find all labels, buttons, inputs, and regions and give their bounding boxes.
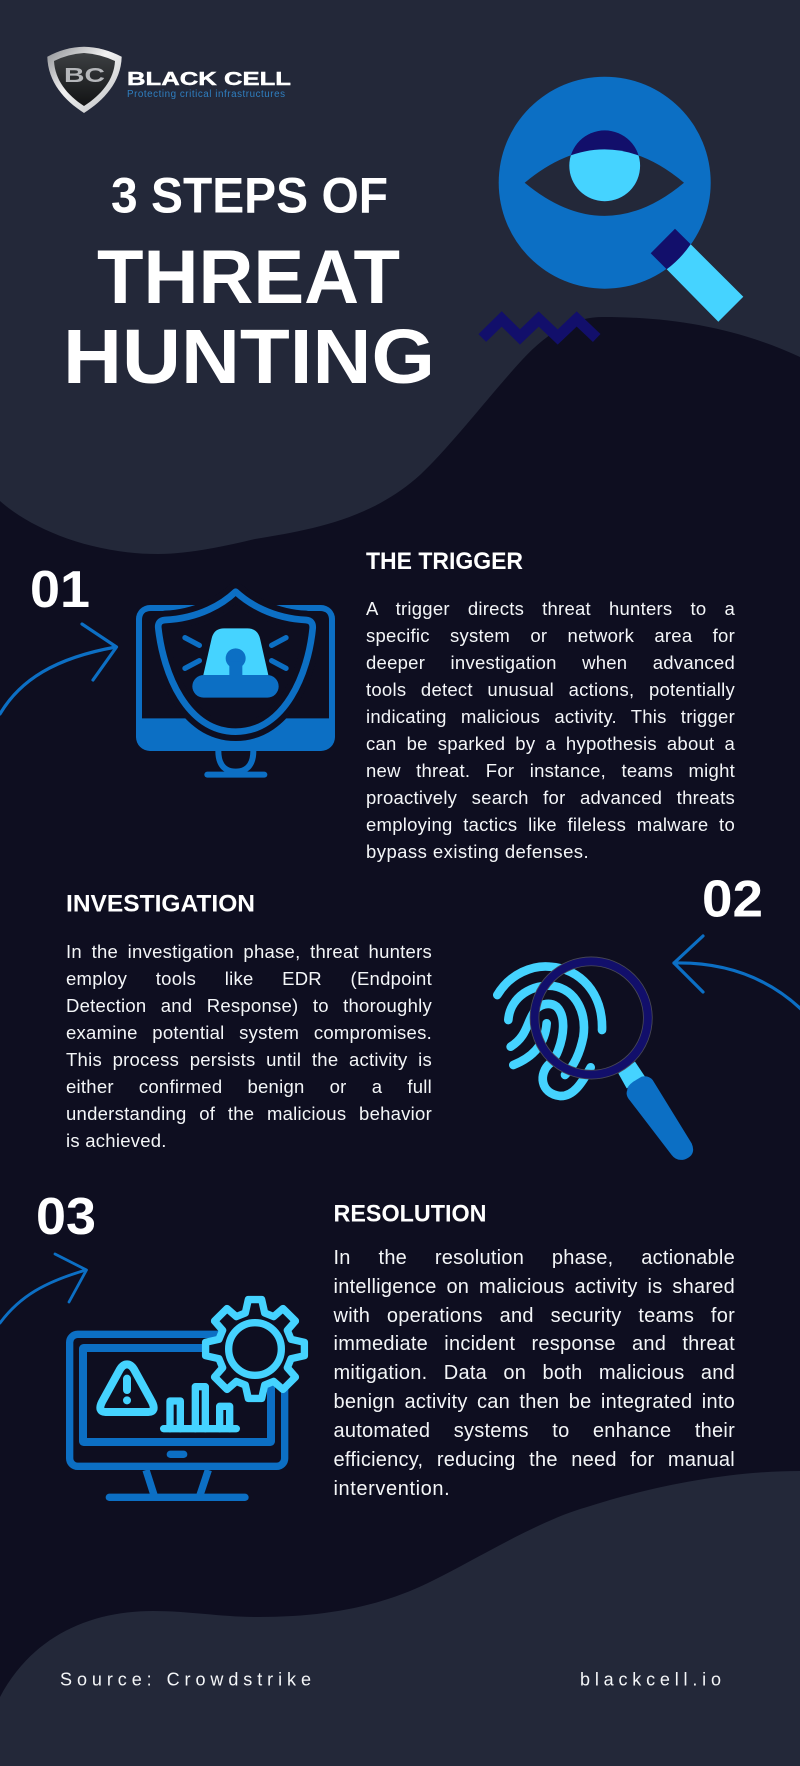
title: HUNTING <box>63 314 435 400</box>
hero icon: magnifying glass with eye <box>499 77 743 322</box>
icon: monitor with shield and alarm <box>136 592 335 775</box>
gear <box>206 1300 304 1398</box>
magnifier <box>618 1062 645 1088</box>
text block: investigation: employ tools like EDR (Endpoint <box>66 968 432 989</box>
arrow 02 <box>674 936 800 1010</box>
text block: investigation: In the investigation phase, threat hunters <box>66 941 432 962</box>
text block: resolution: intervention. <box>334 1478 450 1500</box>
text block: the trigger: tools detect unusual actions, potentially <box>366 679 735 700</box>
text block: the trigger: indicating malicious activity. This trigger <box>366 706 735 727</box>
text block: resolution: mitigation. Data on both malicious and <box>334 1362 735 1384</box>
text block: the trigger: employing tactics like fileless malware to <box>366 814 735 835</box>
fingerprint ridges <box>497 966 602 1096</box>
text block: investigation: is achieved. <box>66 1130 167 1151</box>
text block: investigation: Detection and Response) to thoroughly <box>66 995 432 1016</box>
title: 3 STEPS OF <box>111 168 388 224</box>
heading: investigation: INVESTIGATION <box>66 891 255 918</box>
text block: investigation <box>66 941 432 1151</box>
heading: the trigger: THE TRIGGER <box>366 548 523 575</box>
text block: resolution: intelligence on malicious activity is shared <box>334 1276 735 1298</box>
arrow 03 <box>0 1254 86 1323</box>
text block: resolution: automated systems to enhance their <box>334 1420 735 1442</box>
text block: resolution: efficiency, reducing the need for manual <box>334 1449 735 1471</box>
top wave background <box>0 0 800 554</box>
text block: the trigger: can be sparked by a hypothesis about a <box>366 733 735 754</box>
text block: resolution: benign activity can then be integrated into <box>334 1391 735 1413</box>
heading: resolution: RESOLUTION <box>334 1201 486 1228</box>
logo: Black Cell <box>47 47 291 113</box>
text block: resolution: with operations and security teams for <box>334 1304 735 1326</box>
number 01: 01 <box>30 561 90 619</box>
logo shield <box>47 47 122 113</box>
text block: the trigger: deeper investigation when advanced <box>366 652 735 673</box>
logo shield: BC <box>64 65 105 87</box>
footer source: Source: Crowdstrike <box>60 1670 311 1690</box>
bottom wave background <box>0 1471 800 1766</box>
text block: the trigger: specific system or network area for <box>366 625 735 646</box>
number 03: 03 <box>36 1188 96 1246</box>
text block: resolution <box>334 1247 735 1500</box>
icon: fingerprint under magnifier <box>497 961 693 1160</box>
footer website: blackcell.io <box>580 1670 721 1690</box>
text block: investigation: This process persists until the activity is <box>66 1049 432 1070</box>
logo wordmark: BLACK CELL <box>127 69 291 89</box>
text block: investigation: either confirmed benign or a full <box>66 1076 432 1097</box>
logo tagline: Protecting critical infrastructures <box>127 89 285 100</box>
text block: the trigger: A trigger directs threat hunters to a <box>366 598 735 619</box>
monitor <box>70 1334 285 1497</box>
text block: resolution: In the resolution phase, actionable <box>334 1247 735 1269</box>
title: THREAT <box>97 235 400 320</box>
title <box>63 168 435 400</box>
icon: monitor with alert, bars and gear <box>70 1300 304 1497</box>
decorative zigzag <box>482 319 597 338</box>
text block: investigation: examine potential system compromises. <box>66 1022 432 1043</box>
number 02: 02 <box>702 870 763 928</box>
text block: the trigger <box>366 598 735 862</box>
text block: the trigger: bypass existing defenses. <box>366 841 589 862</box>
warning triangle <box>100 1364 154 1412</box>
arrow 01 <box>0 624 116 714</box>
bar chart <box>164 1387 236 1429</box>
text block: resolution: immediate incident response and threat <box>334 1333 735 1355</box>
text block: the trigger: proactively search for advanced threats <box>366 787 735 808</box>
text block: the trigger: new threat. For instance, teams might <box>366 760 735 781</box>
text block: investigation: understanding of the malicious behavior <box>66 1103 432 1124</box>
